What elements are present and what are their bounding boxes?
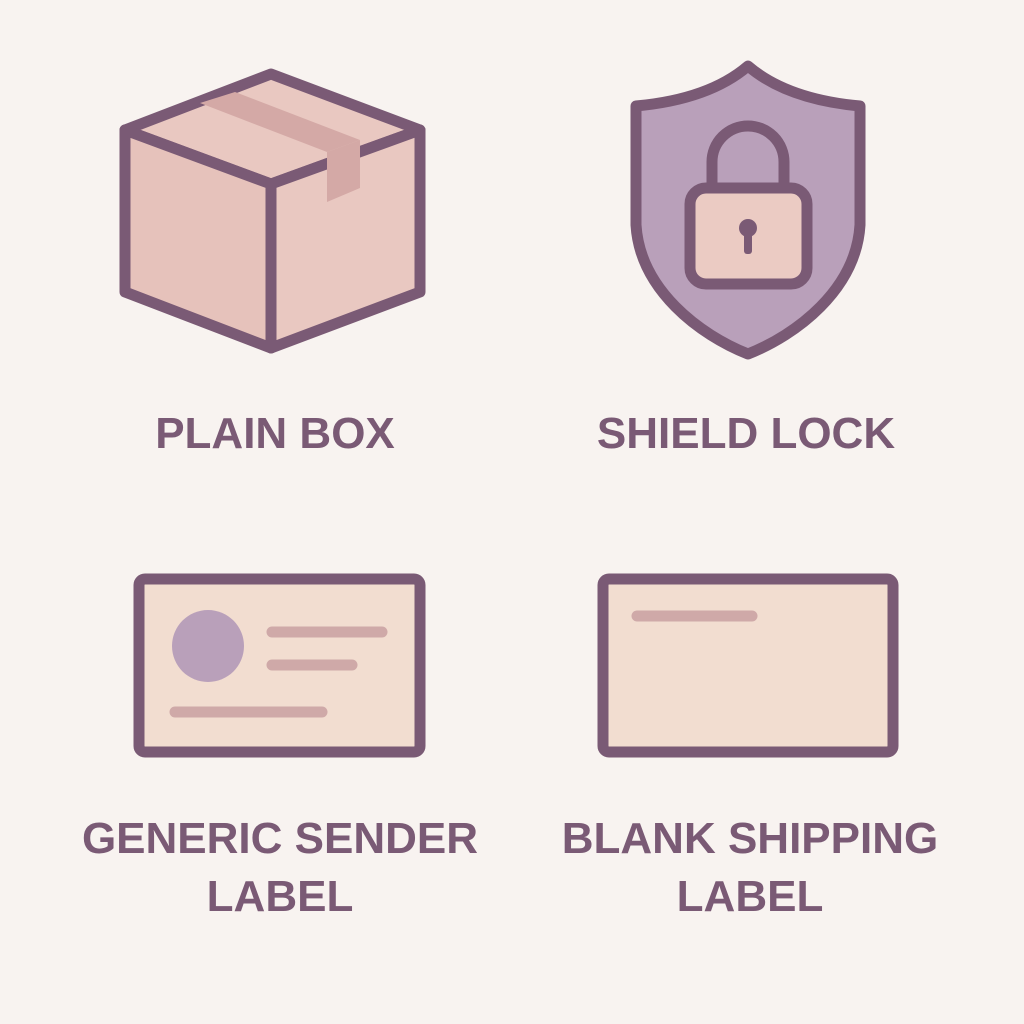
heading: shield lock: SHIELD LOCK: [597, 409, 895, 458]
heading: blank shipping label: LABEL: [677, 872, 823, 921]
icon: shield lock: [636, 66, 860, 354]
heading: generic sender label: GENERIC SENDER: [82, 814, 478, 863]
icon: generic sender label: [139, 579, 420, 752]
heading: plain box: PLAIN BOX: [155, 409, 395, 458]
heading: generic sender label: LABEL: [207, 872, 353, 921]
icon: blank shipping label: [603, 579, 893, 752]
icon: plain box: [125, 74, 420, 348]
heading: blank shipping label: BLANK SHIPPING: [562, 814, 938, 863]
